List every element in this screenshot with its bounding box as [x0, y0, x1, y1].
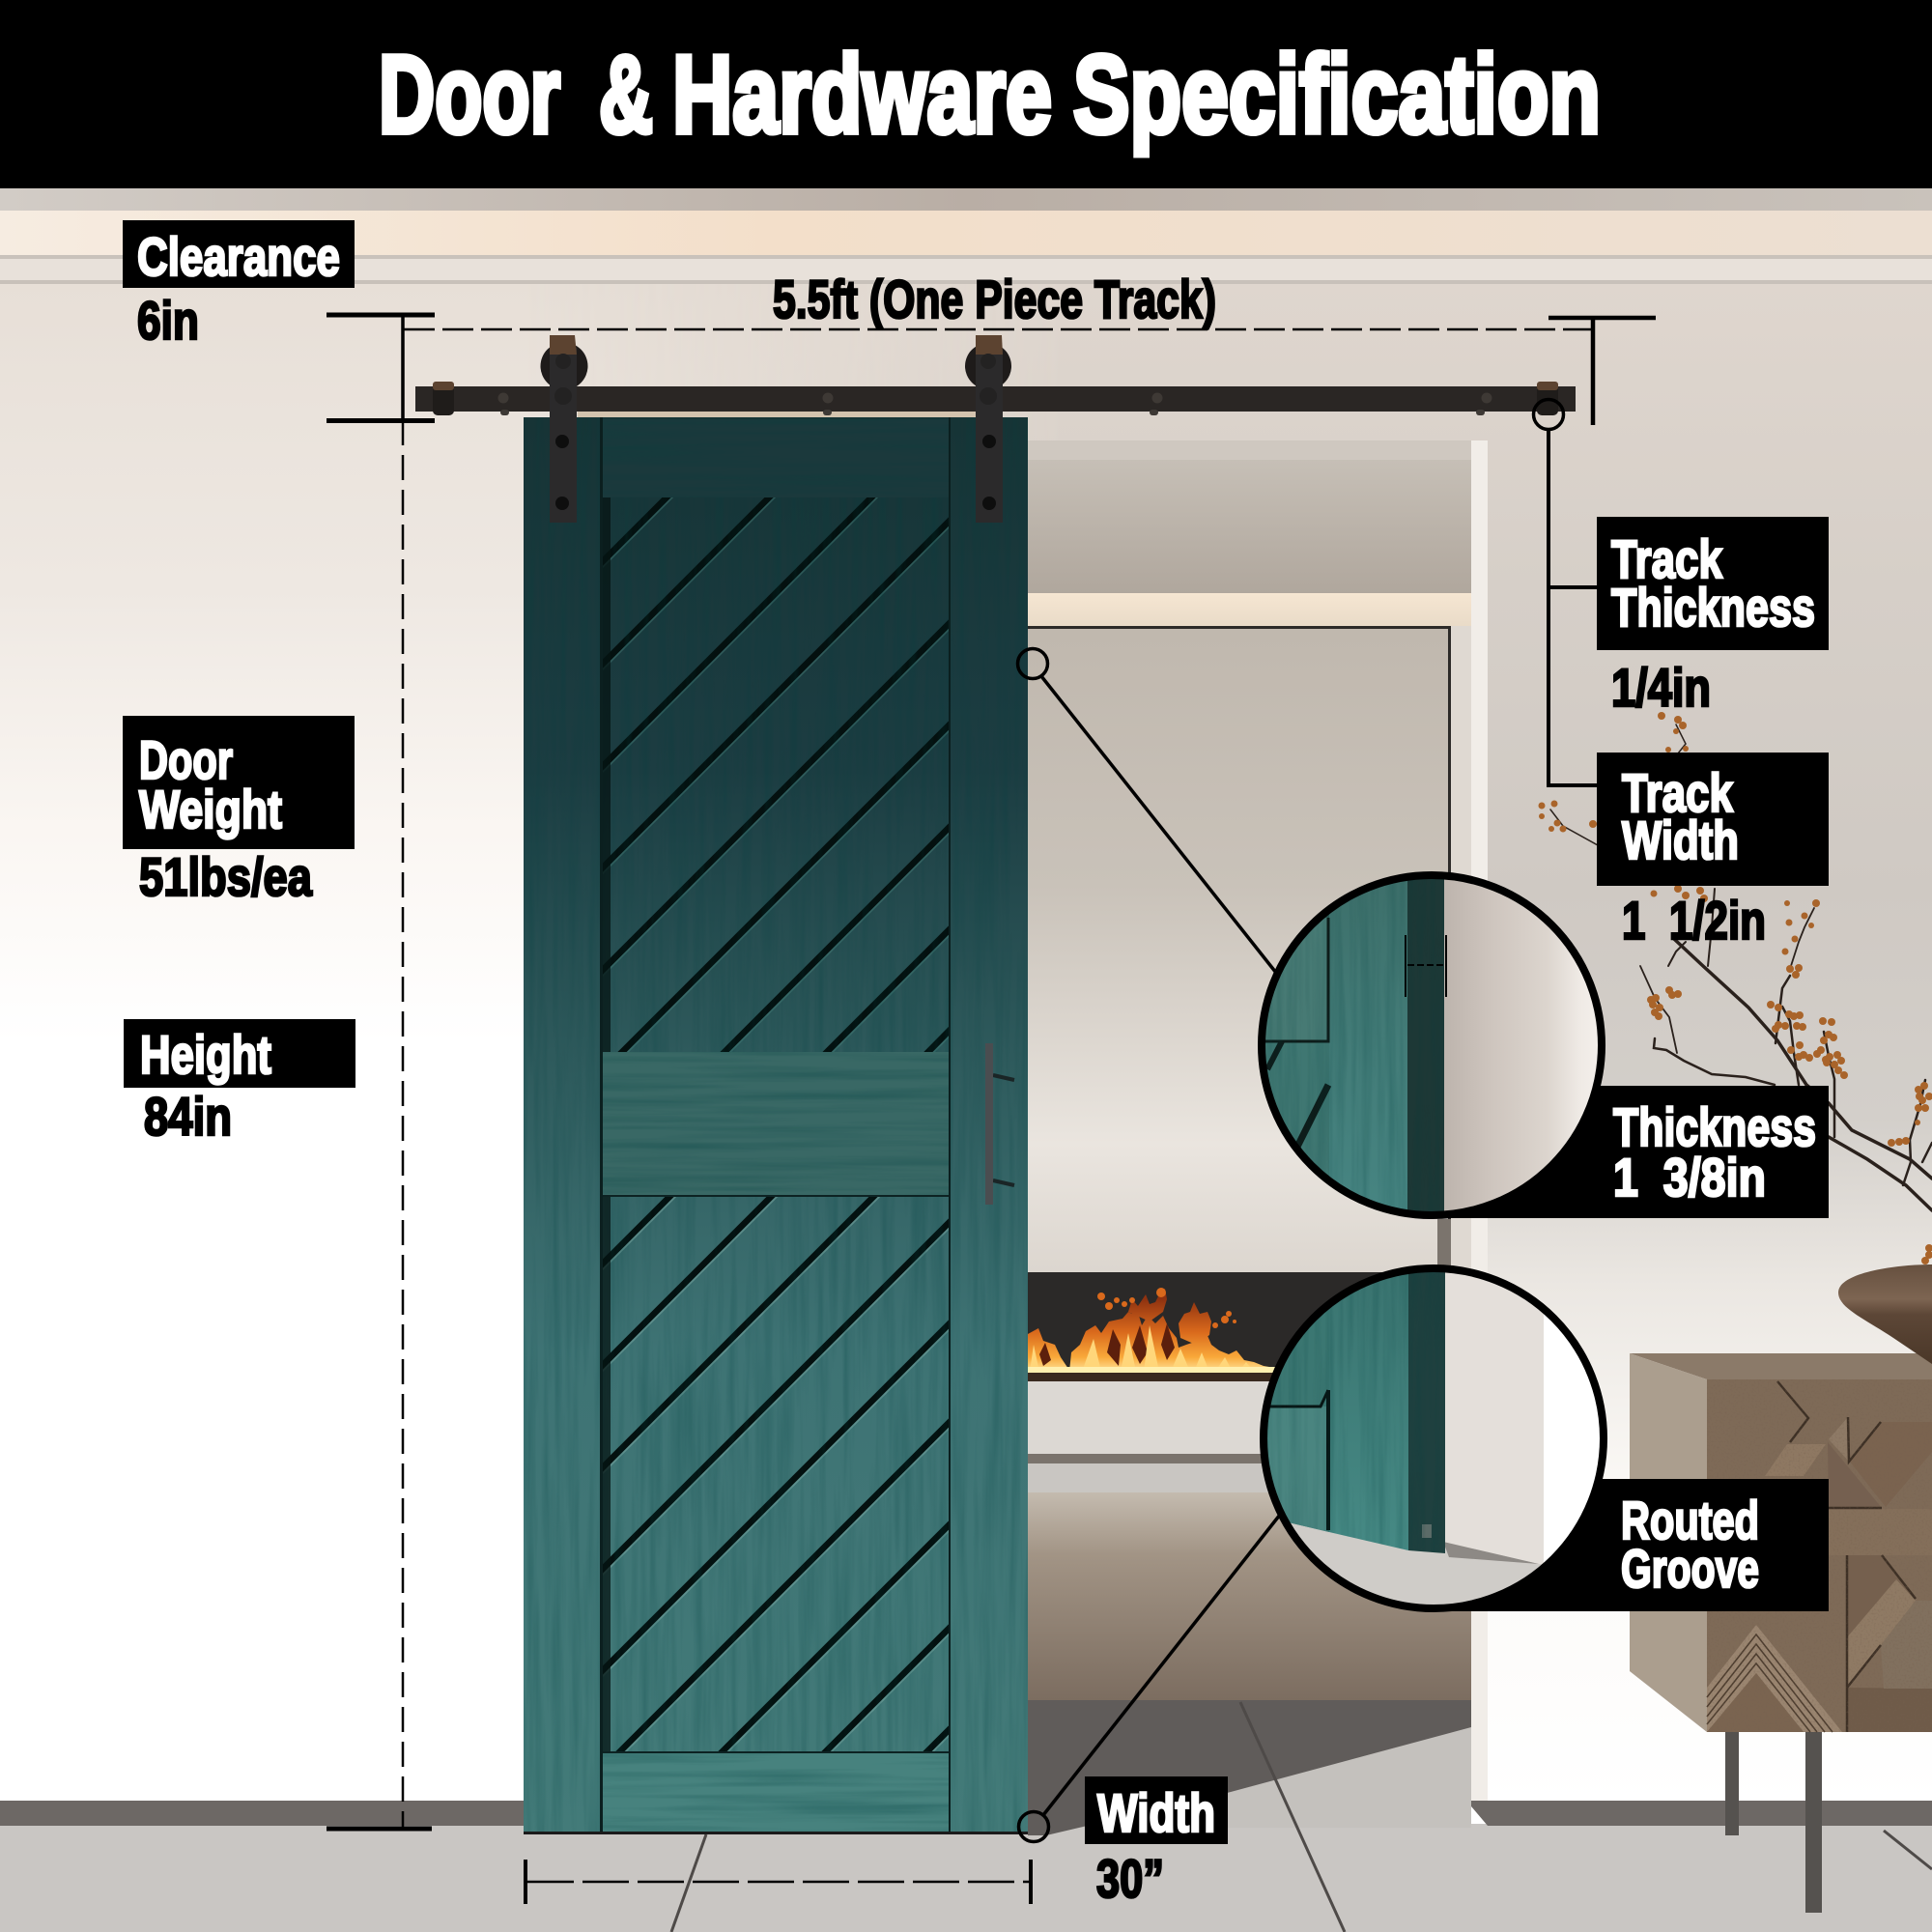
vertical wood grain: [524, 417, 1028, 1832]
end stop left: [433, 382, 454, 415]
header bar: [0, 0, 1932, 188]
label: width: [1085, 1776, 1228, 1909]
door edge: [1407, 869, 1444, 1222]
top rail: [603, 419, 949, 497]
floor: [0, 1824, 1932, 1932]
middle rail: [603, 1052, 949, 1197]
title: Hardware: [672, 34, 1052, 156]
bright flame tongues: [1030, 1325, 1254, 1372]
rail: [1265, 918, 1327, 1039]
doorway opening: [1028, 440, 1488, 1835]
decorative branches: [1538, 712, 1932, 1264]
baseboard right: [1471, 1782, 1932, 1826]
branch lines: [1550, 724, 1932, 1210]
legs: [1725, 1732, 1822, 1913]
upper wall inside doorway: [1028, 460, 1471, 593]
label: height: [124, 1019, 355, 1147]
floor strip behind: [1028, 1454, 1471, 1492]
label: clearance: 6in: [137, 290, 199, 351]
label: track thickness: [1597, 517, 1829, 718]
routed notch: [1422, 1524, 1432, 1538]
right bracket: [1548, 318, 1656, 425]
label: door thickness box: Thickness: [1613, 1096, 1816, 1157]
label: track thickness: 1/4in: [1611, 657, 1711, 718]
bright wall edge: [1544, 1314, 1600, 1563]
label: height: Height: [140, 1024, 271, 1085]
label: door thickness box: 1 3/8in: [1613, 1147, 1766, 1208]
label: clearance: [123, 220, 355, 351]
vase: [1838, 1264, 1932, 1364]
track underside shadow: [578, 412, 976, 417]
circle outline: [1262, 875, 1602, 1215]
floor in doorway: [1028, 1700, 1471, 1828]
floor shadow: [1443, 1542, 1539, 1564]
label: width: Width: [1097, 1782, 1215, 1843]
cove light: [0, 211, 1932, 255]
stile seams: [600, 417, 951, 1832]
door bottom marker and leader: [1018, 1515, 1280, 1841]
edge mark: [1406, 935, 1446, 997]
bottom rail: [603, 1751, 949, 1832]
label: track width: [1597, 753, 1829, 951]
clearance dimension bracket left: [327, 315, 435, 421]
label: door thickness box: [1439, 1086, 1829, 1218]
label: door weight: Weight: [139, 779, 282, 839]
door body: [524, 417, 1028, 1832]
label: track width: 1 1/2in: [1622, 890, 1766, 951]
crown moulding: [0, 255, 1932, 284]
track callout marker and leader: [1534, 400, 1598, 785]
baseboard left: [0, 1801, 524, 1826]
title: Door: [379, 34, 560, 156]
floor: [1291, 1522, 1542, 1605]
label: door weight: 51lbs/ea: [139, 846, 313, 907]
end stop right: [1537, 382, 1558, 415]
cabinet side: [1630, 1353, 1707, 1732]
label: clearance: Clearance: [137, 226, 340, 287]
door face: [1329, 1264, 1408, 1553]
flames: [1028, 1288, 1277, 1381]
lower panel grooves: [603, 1197, 949, 1751]
detail circle: routed groove: [1256, 1264, 1613, 1616]
wall: left: [0, 283, 1932, 1829]
label: track width: Width: [1622, 810, 1739, 870]
detail circle: door thickness: [1256, 869, 1613, 1224]
door handle: [985, 1043, 1014, 1205]
title: [379, 34, 1601, 156]
wall: right: [813, 284, 1932, 1479]
track mounting bolts: [498, 392, 1492, 415]
label: height: 84in: [144, 1086, 232, 1147]
door edge: [1408, 1264, 1445, 1555]
door bottom shadow: [524, 1832, 1028, 1834]
LED strip: [1028, 593, 1471, 626]
barn door: [524, 417, 1028, 1834]
back panel: [1028, 626, 1471, 1272]
shadow on floor: [1028, 1700, 1471, 1835]
track length dashed line: [404, 328, 1592, 330]
seam and grooves: [1256, 918, 1328, 1147]
door face: [1329, 869, 1407, 1222]
door height dashed line: [327, 420, 432, 1829]
label: routed groove box: [1439, 1479, 1829, 1611]
circle outline: [1264, 1268, 1604, 1608]
lower panel: [1265, 1043, 1329, 1177]
label: width: 30”: [1096, 1848, 1164, 1909]
sideboard cabinet: [1630, 1353, 1932, 1913]
label: routed groove box: Groove: [1621, 1538, 1759, 1599]
width dimension: [526, 1860, 1031, 1904]
soffit: [1028, 440, 1488, 460]
barn door track hardware: [415, 335, 1576, 523]
label: track length: 5.5ft (One Piece Track): [773, 269, 1216, 329]
cabinet top: [1630, 1353, 1932, 1379]
door thickness marker and leader: [1018, 649, 1280, 978]
title: Specification: [1073, 34, 1601, 156]
seams: [1256, 1390, 1328, 1530]
flame sparks: [1097, 1288, 1236, 1328]
label: door weight: Door: [139, 729, 233, 790]
dark flame gaps: [1039, 1323, 1175, 1366]
right hanger: [965, 335, 1011, 523]
label: door weight: [123, 716, 355, 907]
dimension lines: [327, 315, 1656, 1904]
label: track thickness: Track: [1611, 528, 1723, 589]
cabinet front: [1707, 1379, 1932, 1732]
doorway frame: [1471, 440, 1488, 1801]
left panel shadow: [603, 497, 611, 1751]
berries: [1538, 712, 1932, 1264]
rug: [1028, 1492, 1471, 1700]
fireplace base: [1028, 1381, 1471, 1454]
left panel: [1256, 1264, 1329, 1534]
label: track width: Track: [1622, 762, 1734, 823]
carved pattern: [1707, 1379, 1932, 1732]
panel top line: [1028, 626, 1451, 629]
ceiling band: [0, 188, 1932, 211]
upper panel grooves: [603, 497, 949, 1052]
title: &: [599, 34, 653, 156]
left hanger: [541, 335, 587, 523]
track rail: [415, 386, 1576, 412]
wall behind: [1444, 879, 1598, 1211]
panel side line: [1448, 626, 1451, 1225]
wall behind: [1445, 1272, 1544, 1565]
upper panel: [1325, 914, 1329, 918]
label: track thickness: Thickness: [1611, 577, 1815, 638]
lower rail: [1256, 1406, 1326, 1532]
label: routed groove box: Routed: [1621, 1490, 1759, 1550]
fireplace recess: [1028, 1272, 1471, 1381]
floor tile lines: [671, 1702, 1932, 1932]
